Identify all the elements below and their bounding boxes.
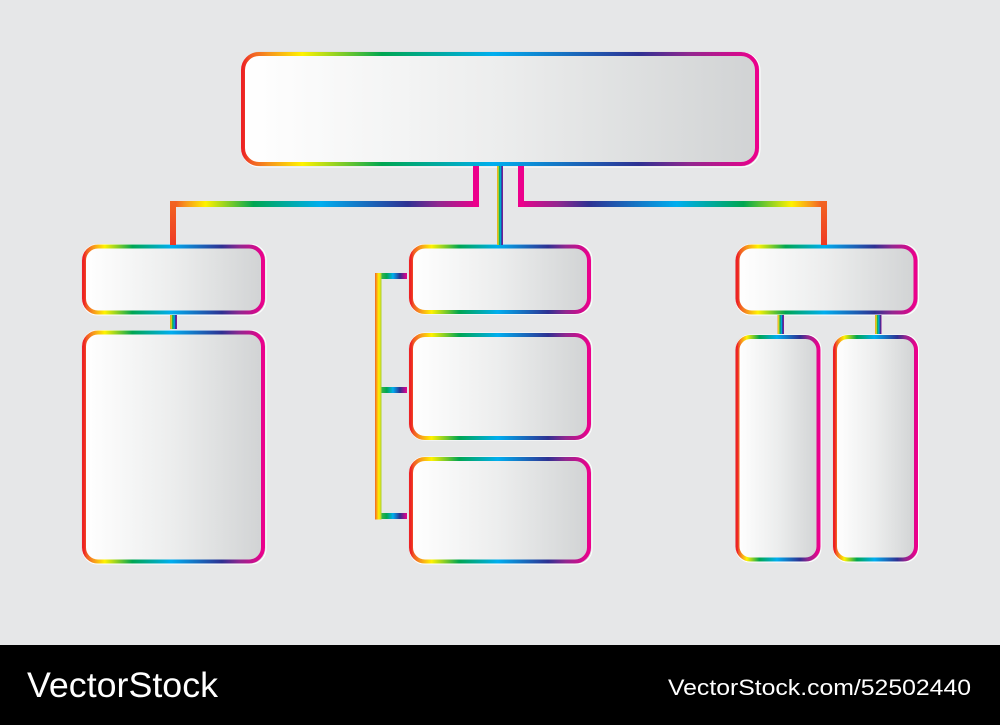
panel: left header box <box>82 244 266 315</box>
panel: centre header box <box>409 244 592 314</box>
panel: centre middle box <box>409 333 592 440</box>
connectors: top box to left branch <box>170 166 479 245</box>
connectors: top box to centre branch <box>497 166 503 245</box>
footer logo text: VectorStock <box>27 666 219 705</box>
panel: right header box <box>736 244 918 315</box>
panel: left body box <box>82 330 266 564</box>
panel: top box <box>242 52 760 167</box>
connector: left header to left body <box>170 315 177 329</box>
panel: right column box one <box>736 335 821 562</box>
footer image id text: VectorStock.com/52502440 <box>668 675 971 700</box>
footer band <box>0 645 1000 725</box>
connectors: top box to right branch <box>518 166 827 245</box>
connectors: right header to right columns <box>778 315 882 334</box>
panel: centre lower box <box>409 457 592 564</box>
bracket: centre column side connector <box>375 273 407 520</box>
panel: right column box two <box>833 335 918 562</box>
